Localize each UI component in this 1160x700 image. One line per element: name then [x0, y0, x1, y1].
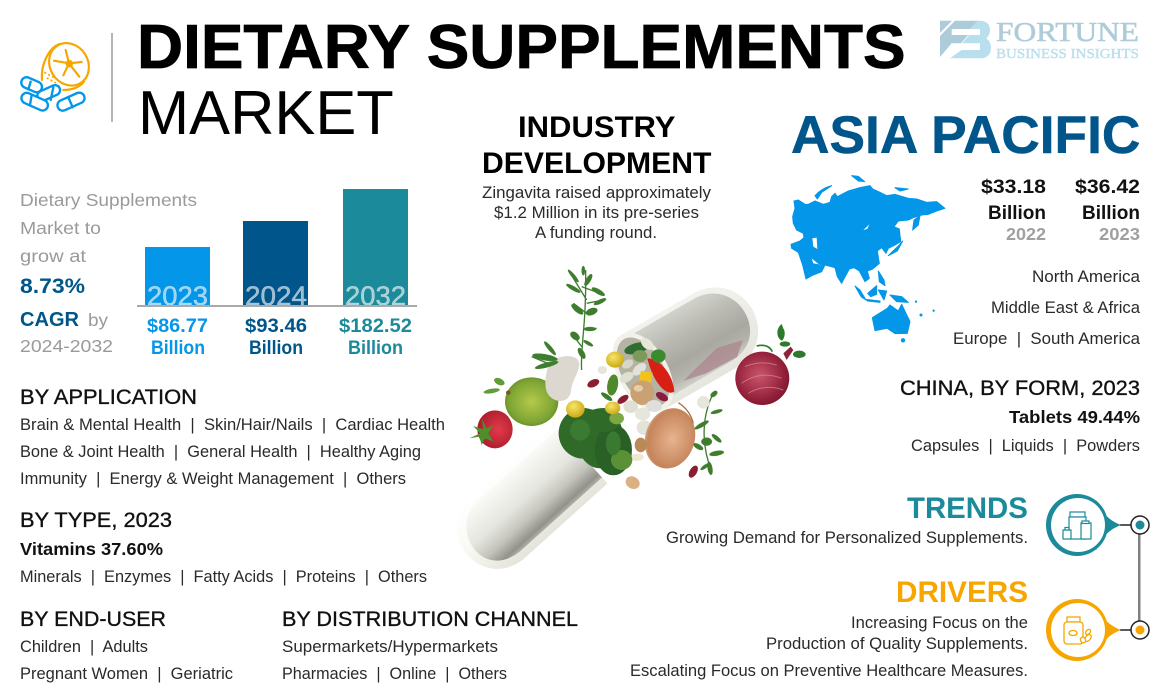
text: other regions: Europe | South America	[953, 330, 1141, 348]
stat: 2023 market size	[1075, 176, 1140, 244]
section: trends: Growing Demand for Personalized Supplements.	[666, 529, 1028, 547]
stat: 2022 market size: 2022	[1006, 224, 1046, 244]
connector line	[1138, 525, 1140, 630]
section: China by form: CHINA, BY FORM, 2023	[900, 376, 1140, 400]
capsule upper half	[600, 272, 774, 422]
section: by distribution channel	[282, 607, 578, 683]
section: by application: BY APPLICATION	[20, 385, 197, 409]
bar chart: market size	[137, 189, 417, 359]
bar 2023: Billion	[151, 337, 205, 359]
heading: Asia Pacific: ASIA PACIFIC	[791, 106, 1140, 165]
section: by type	[20, 508, 427, 586]
section: by distribution channel: BY DISTRIBUTION CHANNEL	[282, 607, 578, 631]
text: CAGR growth statement: Market to	[20, 218, 101, 238]
text: other regions: Middle East & Africa	[991, 299, 1141, 317]
logo: Fortune Business Insights: BUSINESS INSIGHTS	[996, 47, 1139, 62]
icon: trends bottles badge	[1046, 494, 1149, 556]
text: CAGR growth statement: 8.73%	[20, 275, 85, 298]
section: by type: Vitamins 37.60%	[20, 539, 163, 559]
text: CAGR growth statement: grow at	[20, 246, 86, 266]
stat: 2022 market size	[981, 176, 1046, 244]
capsule reflection	[683, 340, 743, 381]
map: Asia Pacific	[791, 176, 945, 342]
section: by application: Immunity | Energy & Weight Management | Others	[20, 470, 406, 488]
section: drivers: Escalating Focus on Preventive Healthcare Measures.	[630, 662, 1028, 680]
icon: orange and capsules logo	[20, 36, 97, 112]
section: by application: Brain & Mental Health | Skin/Hair/Nails | Cardiac Health	[20, 416, 445, 434]
text: CAGR growth statement: by	[88, 310, 108, 330]
title: DIETARY SUPPLEMENTS	[137, 13, 906, 82]
section: drivers: DRIVERS	[896, 576, 1028, 609]
section: drivers: Production of Quality Supplements.	[766, 635, 1028, 653]
stat: 2023 market size: $36.42	[1075, 176, 1140, 198]
section: by end-user: BY END-USER	[20, 607, 166, 631]
broccoli	[559, 408, 632, 475]
text: CAGR growth statement: CAGR	[20, 309, 80, 331]
section: by distribution channel: Pharmacies | Online | Others	[282, 665, 507, 683]
text: CAGR growth statement: Dietary Supplements	[20, 190, 197, 210]
text: other regions: North America	[1032, 268, 1141, 286]
bar 2032: 2032	[345, 281, 406, 311]
section: industry development: DEVELOPMENT	[482, 147, 712, 180]
bar 2023: 2023	[147, 281, 208, 311]
section: trends	[666, 492, 1028, 547]
bar 2024	[243, 221, 308, 359]
logo: Fortune Business Insights	[940, 17, 1139, 62]
herbs	[483, 266, 724, 475]
section: trends: TRENDS	[907, 492, 1028, 525]
section: industry development: $1.2 Million in its pre-series	[494, 204, 699, 222]
bar 2023: $86.77	[147, 315, 208, 337]
title	[137, 13, 906, 148]
section: drivers	[630, 576, 1028, 680]
illustration: capsule with vegetables	[440, 266, 806, 585]
title: MARKET	[138, 79, 394, 148]
section: by type: Minerals | Enzymes | Fatty Acids | Proteins | Others	[20, 568, 427, 586]
logo: Fortune Business Insights: FORTUNE	[996, 17, 1139, 47]
stat: 2023 market size: Billion	[1082, 202, 1140, 224]
section: by end-user: Children | Adults	[20, 638, 148, 656]
stat: 2022 market size: Billion	[988, 202, 1046, 224]
gel capsules	[566, 400, 620, 418]
section: by end-user	[20, 607, 233, 683]
bar 2023	[145, 247, 210, 359]
section: industry development: A funding round.	[535, 224, 657, 242]
stat: 2022 market size: $33.18	[981, 176, 1046, 198]
section: China by form: Capsules | Liquids | Powders	[911, 437, 1140, 455]
bar 2024: 2024	[245, 281, 307, 311]
brown onion	[635, 402, 703, 475]
strawberry	[469, 410, 513, 448]
section: by application	[20, 385, 445, 488]
section: industry development: Zingavita raised approximately	[482, 184, 712, 202]
capsule lower half	[440, 423, 607, 585]
bar 2032	[339, 189, 412, 359]
section: industry development: INDUSTRY	[518, 110, 675, 144]
text: other regions	[953, 268, 1141, 348]
stat: 2023 market size: 2023	[1099, 224, 1140, 244]
pear and bean	[505, 356, 579, 426]
section: by end-user: Pregnant Women | Geriatric	[20, 665, 233, 683]
text: CAGR growth statement: 2024-2032	[20, 336, 113, 356]
red onion	[735, 324, 806, 405]
section: by distribution channel: Supermarkets/Hypermarkets	[282, 638, 498, 656]
text: CAGR growth statement	[20, 190, 197, 356]
section: China by form: Tablets 49.44%	[1009, 407, 1140, 427]
bar 2024: $93.46	[245, 315, 307, 337]
bar 2032: Billion	[348, 337, 403, 359]
bar 2032: $182.52	[339, 315, 412, 337]
icon: drivers supplement jar badge	[1046, 599, 1149, 661]
section: industry development	[482, 110, 712, 242]
divider	[111, 33, 113, 122]
section: China by form	[900, 376, 1140, 455]
section: by application: Bone & Joint Health | General Health | Healthy Aging	[20, 443, 421, 461]
section: drivers: Increasing Focus on the	[851, 614, 1028, 632]
capsule contents	[586, 336, 700, 492]
bar 2024: Billion	[249, 337, 303, 359]
section: by type: BY TYPE, 2023	[20, 508, 172, 532]
